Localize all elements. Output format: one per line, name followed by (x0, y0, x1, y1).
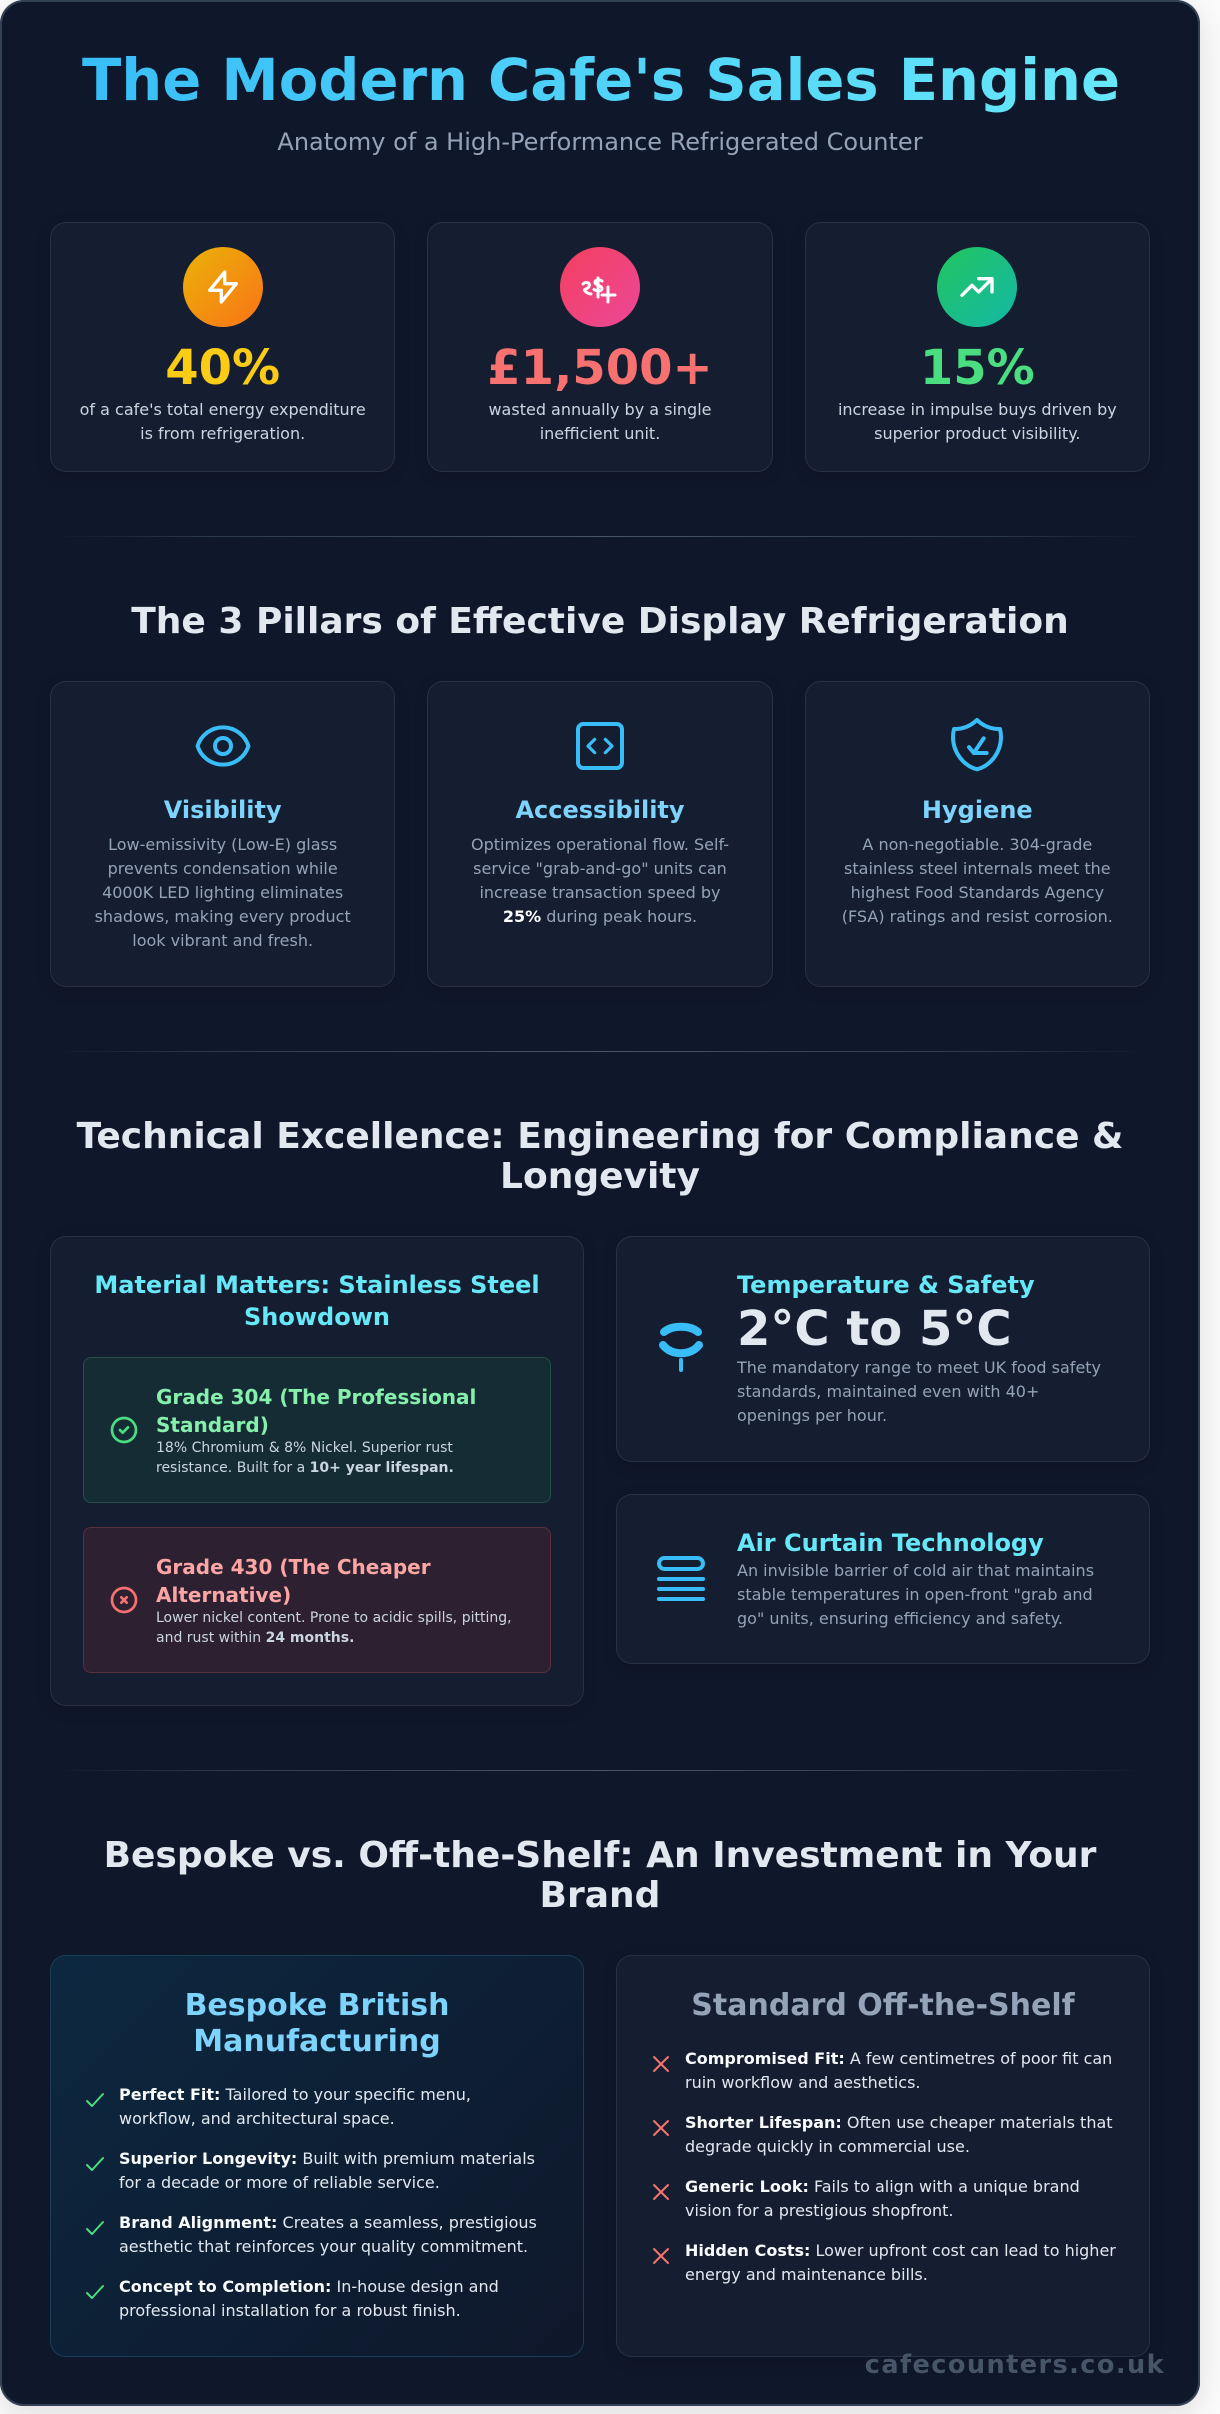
panel: hygiene (805, 681, 1150, 987)
item: concept to completion: professional installation for a robust finish. (119, 2301, 461, 2320)
pillar text: 25% during peak hours. (503, 907, 697, 926)
panel heading: Showdown (244, 1303, 390, 1331)
temperature value: 2°C to 5°C (737, 1301, 1012, 1357)
stat description: superior product visibility. (874, 424, 1080, 443)
pillar text: shadows, making every product (95, 907, 351, 926)
panel heading: Bespoke British (185, 1988, 449, 2023)
panel: material matters (50, 1236, 584, 1706)
icon: code box (576, 722, 624, 770)
item: concept to completion: Concept to Completion: In-house design and (119, 2277, 499, 2296)
item: generic look: Generic Look: Fails to align with a unique brand (685, 2177, 1080, 2196)
grade 304 text: 18% Chromium & 8% Nickel. Superior rust (156, 1440, 453, 1456)
grade 304 text (156, 1440, 454, 1476)
drawbacks list (653, 2049, 1116, 2284)
air curtain text: An invisible barrier of cold air that maintains (737, 1561, 1094, 1580)
panel heading: Standard Off-the-Shelf (691, 1988, 1075, 2023)
stat number: 15% (920, 340, 1035, 396)
item: brand alignment: aesthetic that reinforces your quality commitment. (119, 2237, 528, 2256)
heading: technical excellence (76, 1116, 1123, 1197)
stat description: of a cafe's total energy expenditure (80, 400, 366, 419)
pillar text: A non-negotiable. 304-grade (862, 835, 1092, 854)
pillar title: Visibility (164, 796, 282, 824)
temperature text: The mandatory range to meet UK food safety (737, 1358, 1101, 1377)
pillar text: stainless steel internals meet the (844, 859, 1111, 878)
panel heading (185, 1988, 449, 2059)
item: generic look: vision for a prestigious shopfront. (685, 2201, 954, 2220)
item: compromised fit: ruin workflow and aesthetics. (685, 2073, 921, 2092)
panel: stat impulse (805, 222, 1150, 472)
temperature text: standards, maintained even with 40+ (737, 1382, 1039, 1401)
panel: stat waste (427, 222, 773, 472)
subtitle: Anatomy of a High-Performance Refrigerated Counter (277, 128, 923, 156)
panel heading: Material Matters: Stainless Steel (94, 1271, 540, 1299)
item: shorter lifespan: Shorter Lifespan: Often use cheaper materials that (685, 2113, 1113, 2132)
temperature text: openings per hour. (737, 1406, 887, 1425)
grade 304 text: resistance. Built for a 10+ year lifespan. (156, 1460, 454, 1476)
heading: technical excellence: Longevity (500, 1156, 700, 1197)
stat description: inefficient unit. (540, 424, 660, 443)
temperature text (736, 1358, 1101, 1425)
pillar text: highest Food Standards Agency (851, 883, 1104, 902)
item: superior longevity: Superior Longevity: Built with premium materials (119, 2149, 535, 2168)
pillar title: Hygiene (922, 796, 1033, 824)
heading: bespoke vs off-the-shelf: Bespoke vs. Off-the-Shelf: An Investment in Your (104, 1835, 1096, 1876)
panel: off-the-shelf (616, 1955, 1150, 2357)
stat number: 40% (165, 340, 280, 396)
heading: technical excellence: Technical Excellence: Engineering for Compliance & (77, 1116, 1123, 1157)
item: brand alignment (86, 2213, 537, 2256)
item: hidden costs: energy and maintenance bills. (685, 2265, 928, 2284)
item: shorter lifespan (653, 2113, 1113, 2156)
stat description: wasted annually by a single (488, 400, 712, 419)
icon: temperature arcs (659, 1322, 703, 1372)
grade 304 title (156, 1385, 476, 1437)
stat number: £1,500+ (487, 340, 713, 396)
grade 304 box (83, 1357, 551, 1503)
item: compromised fit: Compromised Fit: A few centimetres of poor fit can (685, 2049, 1112, 2068)
grade 304 title: Standard) (156, 1413, 269, 1437)
pillar text: service "grab-and-go" units can (473, 859, 727, 878)
grade 430 title: Grade 430 (The Cheaper (156, 1555, 431, 1579)
panel heading: Manufacturing (193, 2024, 441, 2059)
pillar text (842, 835, 1113, 926)
grade 430 text: Lower nickel content. Prone to acidic spills, pitting, (156, 1610, 512, 1626)
heading: bespoke vs off-the-shelf (104, 1835, 1096, 1916)
item: brand alignment: Brand Alignment: Creates a seamless, prestigious (119, 2213, 537, 2232)
grade 430 box (83, 1527, 551, 1673)
pillar text (95, 835, 351, 950)
icon: x circle (110, 1586, 138, 1614)
panel: bespoke (50, 1955, 584, 2357)
air curtain text: go" units, ensuring efficiency and safety. (737, 1609, 1063, 1628)
item: generic look (653, 2177, 1080, 2220)
pillar text: prevents condensation while (108, 859, 338, 878)
item: perfect fit: Perfect Fit: Tailored to your specific menu, (119, 2085, 471, 2104)
stat description (80, 400, 366, 443)
item: perfect fit (86, 2085, 471, 2128)
item: hidden costs: Hidden Costs: Lower upfront cost can lead to higher (685, 2241, 1116, 2260)
item: superior longevity: for a decade or more of reliable service. (119, 2173, 440, 2192)
pillar text: Optimizes operational flow. Self- (471, 835, 729, 854)
grade 430 title (156, 1555, 431, 1607)
grade 430 title: Alternative) (156, 1583, 291, 1607)
stat description (838, 400, 1117, 443)
air curtain text (737, 1561, 1094, 1628)
pillar text: look vibrant and fresh. (132, 931, 313, 950)
pillar title: Accessibility (515, 796, 685, 824)
icon: lightning bolt (183, 247, 263, 327)
pillar text: (FSA) ratings and resist corrosion. (842, 907, 1113, 926)
pillar text (471, 835, 729, 926)
grade 304 title: Grade 304 (The Professional (156, 1385, 476, 1409)
panel: temperature (616, 1236, 1150, 1462)
item: superior longevity (86, 2149, 535, 2192)
stat description: is from refrigeration. (140, 424, 305, 443)
icon: money (560, 247, 640, 327)
item: shorter lifespan: degrade quickly in commercial use. (685, 2137, 970, 2156)
panel: visibility (50, 681, 395, 987)
heading: pillars: The 3 Pillars of Effective Display Refrigeration (131, 601, 1069, 642)
air curtain title: Air Curtain Technology (737, 1529, 1044, 1557)
grade 430 text: and rust within 24 months. (156, 1630, 354, 1646)
title: The Modern Cafe's Sales Engine (82, 47, 1120, 114)
item: compromised fit (653, 2049, 1112, 2092)
item: perfect fit: workflow, and architectural space. (119, 2109, 395, 2128)
icon: check circle (110, 1416, 138, 1444)
air curtain text: stable temperatures in open-front "grab and (737, 1585, 1093, 1604)
footer brand: cafecounters.co.uk (865, 2350, 1165, 2380)
pillar text: increase transaction speed by (479, 883, 721, 902)
panel: air curtain (616, 1494, 1150, 1664)
item: hidden costs (653, 2241, 1116, 2284)
icon: shield check (951, 718, 1003, 772)
benefits list (86, 2085, 537, 2320)
item: concept to completion (86, 2277, 499, 2320)
temperature title: Temperature & Safety (737, 1271, 1035, 1299)
icon: trending up (937, 247, 1017, 327)
stat description: increase in impulse buys driven by (838, 400, 1117, 419)
grade 430 text (156, 1610, 512, 1646)
pillar text: Low-emissivity (Low-E) glass (108, 835, 337, 854)
panel: accessibility (427, 681, 773, 987)
icon: eye (196, 725, 250, 767)
panel heading (94, 1271, 540, 1331)
icon: air curtain (657, 1556, 705, 1601)
pillar text: 4000K LED lighting eliminates (102, 883, 343, 902)
heading: bespoke vs off-the-shelf: Brand (540, 1875, 660, 1916)
stat description (488, 400, 712, 443)
panel: stat energy (50, 222, 395, 472)
